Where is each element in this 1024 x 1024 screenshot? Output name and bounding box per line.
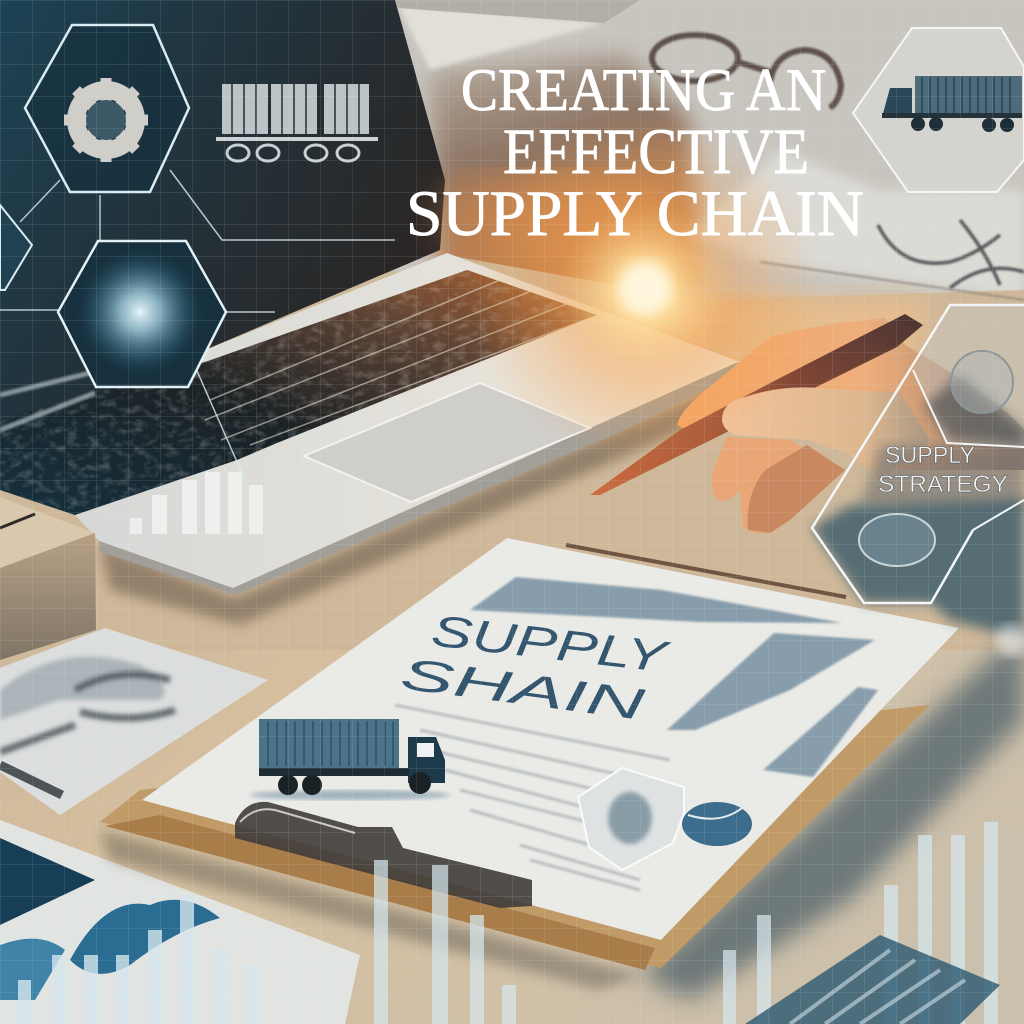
truck on document — [250, 719, 450, 800]
supply chain handwritten text: SUPPLY — [429, 606, 673, 682]
glowing orb hexagon — [58, 241, 226, 387]
paper document — [142, 538, 959, 940]
sun glow — [470, 115, 820, 465]
chart bars at the bottom — [374, 822, 998, 1024]
bottom-left chart sheet — [0, 820, 360, 1024]
desk clutter at right — [760, 220, 1024, 300]
supply strategy hexagon — [812, 305, 1024, 640]
coin icon on paper — [682, 802, 752, 846]
sketched graphics on paper — [470, 577, 878, 777]
gear icon — [64, 78, 148, 162]
title: CREATING AN — [461, 57, 826, 123]
hand holding pen — [590, 314, 1024, 533]
lower fingers — [712, 437, 840, 533]
bottom-left bars — [18, 895, 259, 1024]
laptop keyboard — [0, 270, 597, 515]
upper backdrop — [0, 0, 1024, 650]
title — [406, 57, 864, 250]
glasses — [652, 35, 841, 108]
cardboard box — [0, 497, 96, 660]
pen — [590, 314, 923, 495]
sparkle at right — [996, 624, 1024, 656]
supply chain handwritten text: SHAIN — [398, 649, 647, 730]
white streaks across dark screen — [0, 345, 205, 430]
top-right truck hexagon — [853, 28, 1024, 192]
clip of clipboard — [235, 802, 532, 908]
supply strategy label: STRATEGY — [878, 471, 1008, 498]
supply strategy label: SUPPLY — [885, 442, 975, 469]
small bar graphic on laptop — [130, 472, 263, 534]
bottom-right dark chart — [745, 935, 1000, 1024]
supply strategy label — [878, 442, 1008, 498]
network connector lines — [0, 170, 395, 480]
supply chain handwritten text — [398, 606, 673, 730]
pallet of containers icon — [216, 84, 378, 161]
thumb and back of hand — [677, 318, 1024, 470]
title: EFFECTIVE — [503, 116, 809, 188]
laptop shadow on desk — [100, 385, 730, 625]
left edge hexagon — [0, 205, 32, 290]
top-left gear hexagon — [25, 25, 189, 192]
sheet at left with tools — [0, 628, 268, 815]
laptop trackpad — [304, 383, 590, 502]
index finger — [722, 387, 930, 480]
clipboard — [100, 538, 959, 970]
title: SUPPLY CHAIN — [406, 178, 864, 250]
laptop — [0, 253, 740, 595]
truck icon — [882, 76, 1022, 132]
shield seal on paper — [578, 768, 684, 870]
clipboard shadow — [100, 640, 1024, 1000]
